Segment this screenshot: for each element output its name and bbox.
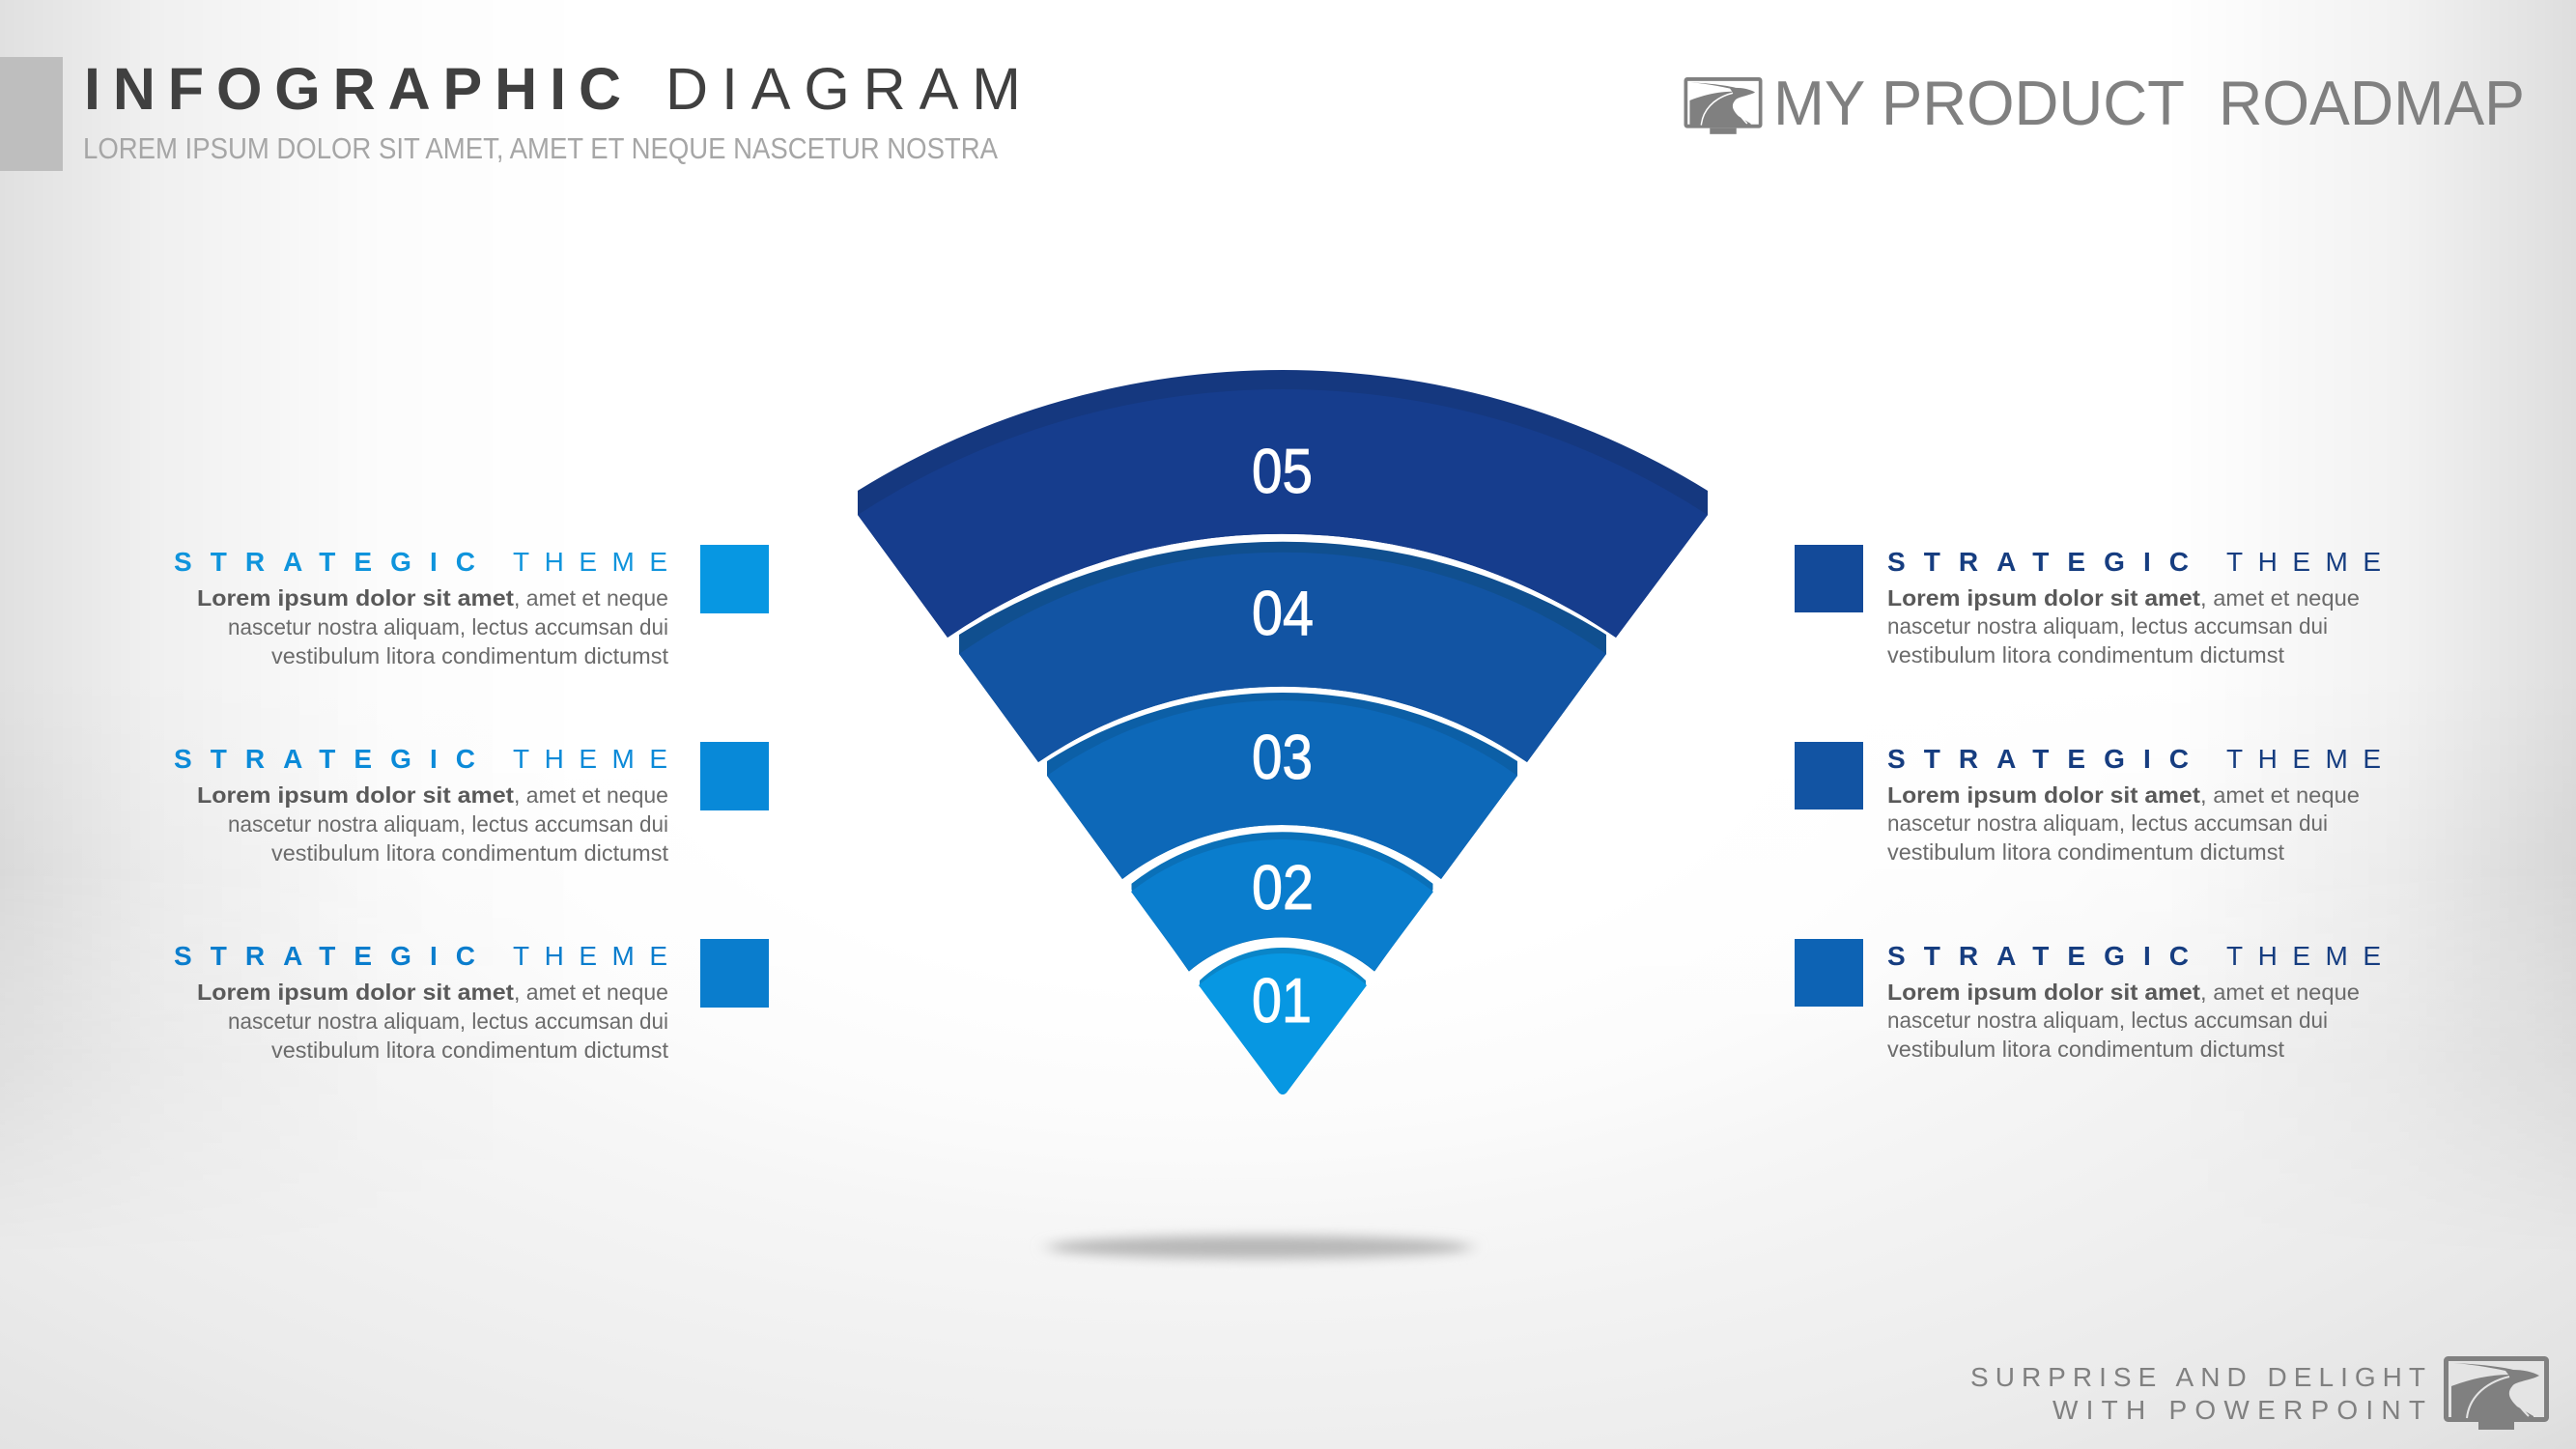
title: DIAGRAM — [665, 56, 1021, 122]
heading left 2 — [174, 744, 667, 774]
segment 03: 03 — [1252, 722, 1313, 792]
body right 1: Lorem ipsum dolor sit amet — [1887, 585, 2200, 611]
footer tagline: SURPRISE AND DELIGHT — [1970, 1362, 2425, 1392]
body left 3: nascetur nostra aliquam, lectus accumsan dui — [228, 1009, 668, 1034]
heading right 2: THEME — [2226, 744, 2381, 774]
body right 3: Lorem ipsum dolor sit amet — [1887, 980, 2200, 1005]
title — [84, 56, 1021, 122]
body right 1: nascetur nostra aliquam, lectus accumsan dui — [1887, 613, 2328, 639]
heading right 2: STRATEGIC — [1887, 744, 2189, 774]
icon: roadmap logo top — [1685, 79, 1761, 134]
panel: right theme 2 — [1795, 742, 2381, 865]
body left 1: vestibulum litora condimentum dictumst — [271, 643, 669, 668]
body left 1 — [197, 585, 669, 668]
heading left 2: THEME — [513, 744, 667, 774]
body left 1: , amet et neque — [514, 585, 668, 611]
body left 2: Lorem ipsum dolor sit amet — [197, 782, 514, 808]
body right 1: , amet et neque — [2200, 585, 2360, 611]
heading left 3: STRATEGIC — [174, 941, 475, 971]
product roadmap heading: MY PRODUCT — [1773, 68, 2185, 138]
segment 01: 01 — [1252, 965, 1312, 1036]
segment 03 — [1047, 693, 1517, 879]
panel: left theme 3 — [174, 939, 769, 1063]
heading left 3 — [174, 941, 667, 971]
panel: right theme 3 — [1795, 939, 2381, 1062]
heading left 1: STRATEGIC — [174, 547, 475, 577]
heading left 1: THEME — [513, 547, 667, 577]
panel: left theme 1 — [174, 545, 769, 668]
body left 2: vestibulum litora condimentum dictumst — [271, 840, 669, 866]
heading right 1 — [1887, 547, 2381, 577]
heading left 2: STRATEGIC — [174, 744, 475, 774]
heading right 2 — [1887, 744, 2381, 774]
segment 04 — [959, 542, 1606, 762]
segment 04: 04 — [1252, 578, 1314, 648]
footer tagline — [1970, 1362, 2425, 1425]
title: INFOGRAPHIC — [84, 56, 621, 122]
body right 3: nascetur nostra aliquam, lectus accumsan dui — [1887, 1008, 2328, 1033]
body right 2: , amet et neque — [2200, 782, 2360, 808]
body left 2: nascetur nostra aliquam, lectus accumsan dui — [228, 811, 668, 837]
panel: right theme 1 — [1795, 545, 2381, 668]
heading right 3: THEME — [2226, 941, 2381, 971]
product roadmap heading: ROADMAP — [2219, 68, 2525, 138]
body left 3: , amet et neque — [514, 980, 668, 1005]
body right 3 — [1887, 980, 2360, 1062]
segment 02: 02 — [1252, 852, 1314, 923]
body right 1: vestibulum litora condimentum dictumst — [1887, 642, 2285, 668]
icon: roadmap logo footer — [2446, 1358, 2546, 1430]
body left 1: Lorem ipsum dolor sit amet — [197, 585, 514, 611]
heading right 3: STRATEGIC — [1887, 941, 2189, 971]
body right 2 — [1887, 782, 2360, 865]
heading right 1: STRATEGIC — [1887, 547, 2189, 577]
body right 2: vestibulum litora condimentum dictumst — [1887, 839, 2285, 865]
body left 3: Lorem ipsum dolor sit amet — [197, 980, 514, 1005]
floor shadow — [1047, 1236, 1472, 1259]
heading right 3 — [1887, 941, 2381, 971]
body left 2: , amet et neque — [514, 782, 668, 808]
body right 2: nascetur nostra aliquam, lectus accumsan dui — [1887, 810, 2328, 836]
subtitle: LOREM IPSUM DOLOR SIT AMET, AMET ET NEQUE NASCETUR NOSTRA — [83, 131, 998, 165]
body right 1 — [1887, 585, 2360, 668]
funnel fan diagram — [858, 370, 1708, 1094]
segment 02 — [1131, 833, 1433, 971]
body right 2: Lorem ipsum dolor sit amet — [1887, 782, 2200, 808]
body left 3 — [197, 980, 669, 1063]
body left 3: vestibulum litora condimentum dictumst — [271, 1037, 669, 1063]
body left 1: nascetur nostra aliquam, lectus accumsan dui — [228, 614, 668, 639]
body right 3: vestibulum litora condimentum dictumst — [1887, 1037, 2285, 1062]
footer tagline: WITH POWERPOINT — [2052, 1395, 2425, 1425]
body right 3: , amet et neque — [2200, 980, 2360, 1005]
heading right 1: THEME — [2226, 547, 2381, 577]
body left 2 — [197, 782, 669, 866]
heading left 3: THEME — [513, 941, 667, 971]
segment 01 — [1199, 948, 1367, 1094]
heading left 1 — [174, 547, 667, 577]
panel: left theme 2 — [174, 742, 769, 866]
segment 05 — [858, 370, 1708, 638]
segment 05: 05 — [1252, 436, 1313, 506]
product roadmap heading — [1773, 68, 2525, 138]
header accent bar — [0, 57, 63, 171]
